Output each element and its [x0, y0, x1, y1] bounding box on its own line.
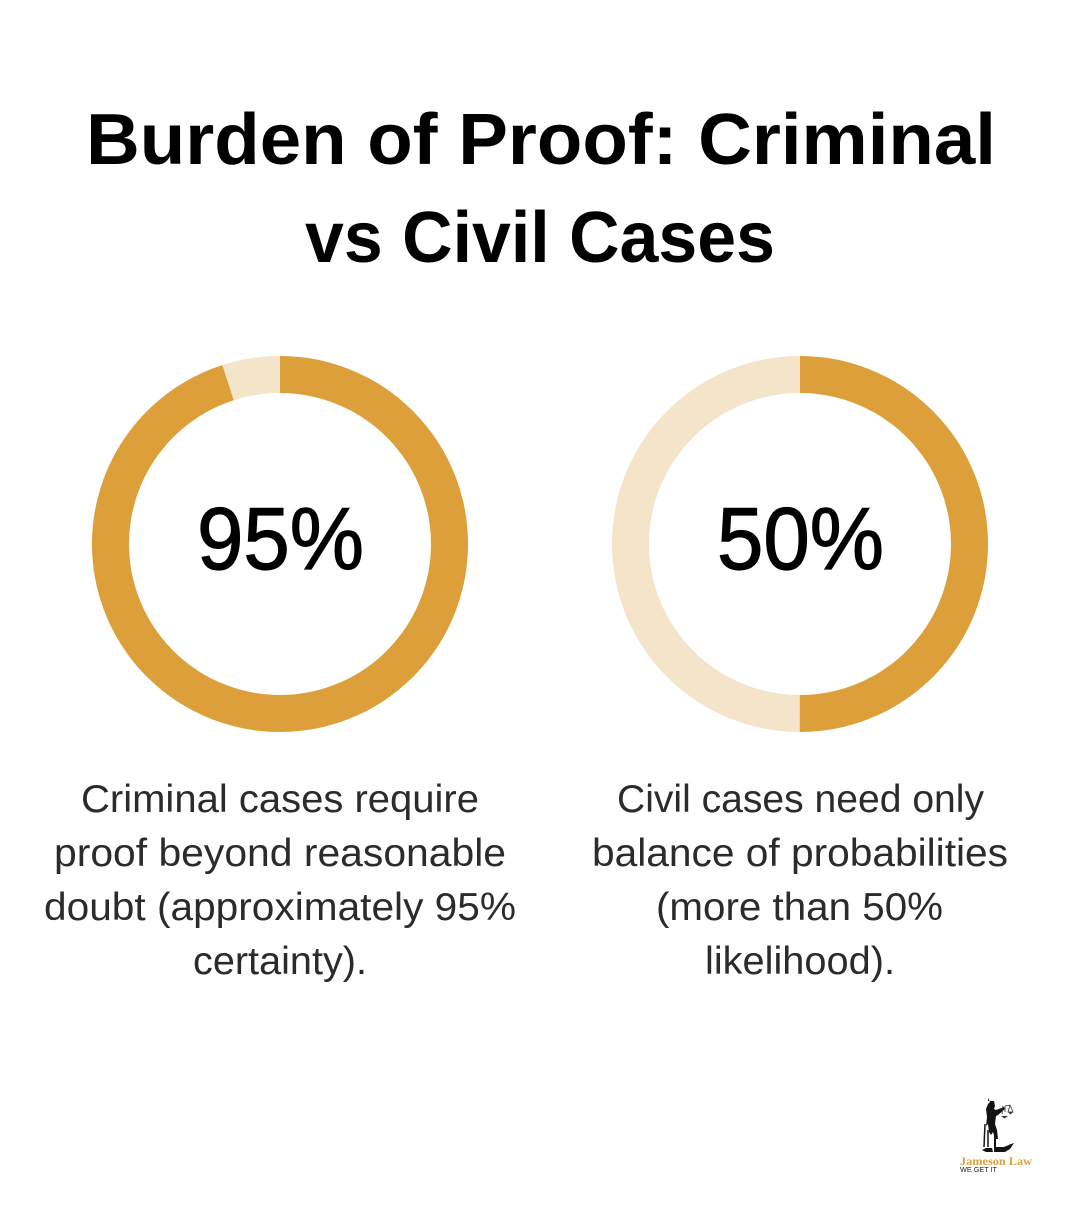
title: vs Civil Cases: [305, 198, 775, 278]
donut chart: 50%: 50%: [717, 489, 884, 588]
icon: lady justice: [982, 1098, 1014, 1152]
text block: civil description: balance of probabilities: [592, 832, 1008, 875]
donut chart: 95%: [110, 374, 450, 714]
text block: civil description: likelihood).: [705, 940, 895, 983]
brand name: Jameson Law: [960, 1156, 1033, 1168]
donut chart: 95%: 95%: [197, 489, 364, 588]
logo: Jameson Law: [960, 1098, 1033, 1168]
text block: criminal description: Criminal cases require: [81, 778, 479, 821]
text block: civil description: Civil cases need only: [617, 778, 984, 821]
text block: civil description: [592, 778, 1008, 983]
text block: criminal description: [44, 778, 516, 983]
tagline: WE GET IT: [960, 1167, 998, 1174]
panel: criminal cases: [44, 374, 516, 983]
title: Burden of Proof: Criminal: [86, 100, 996, 180]
text block: criminal description: doubt (approximately 95%: [44, 886, 516, 929]
title: [86, 100, 996, 278]
text block: civil description: (more than 50%: [656, 886, 943, 929]
donut chart: 50%: [630, 374, 970, 714]
text block: criminal description: proof beyond reasonable: [54, 832, 506, 875]
panel: civil cases: [592, 374, 1008, 983]
text block: criminal description: certainty).: [193, 940, 367, 983]
